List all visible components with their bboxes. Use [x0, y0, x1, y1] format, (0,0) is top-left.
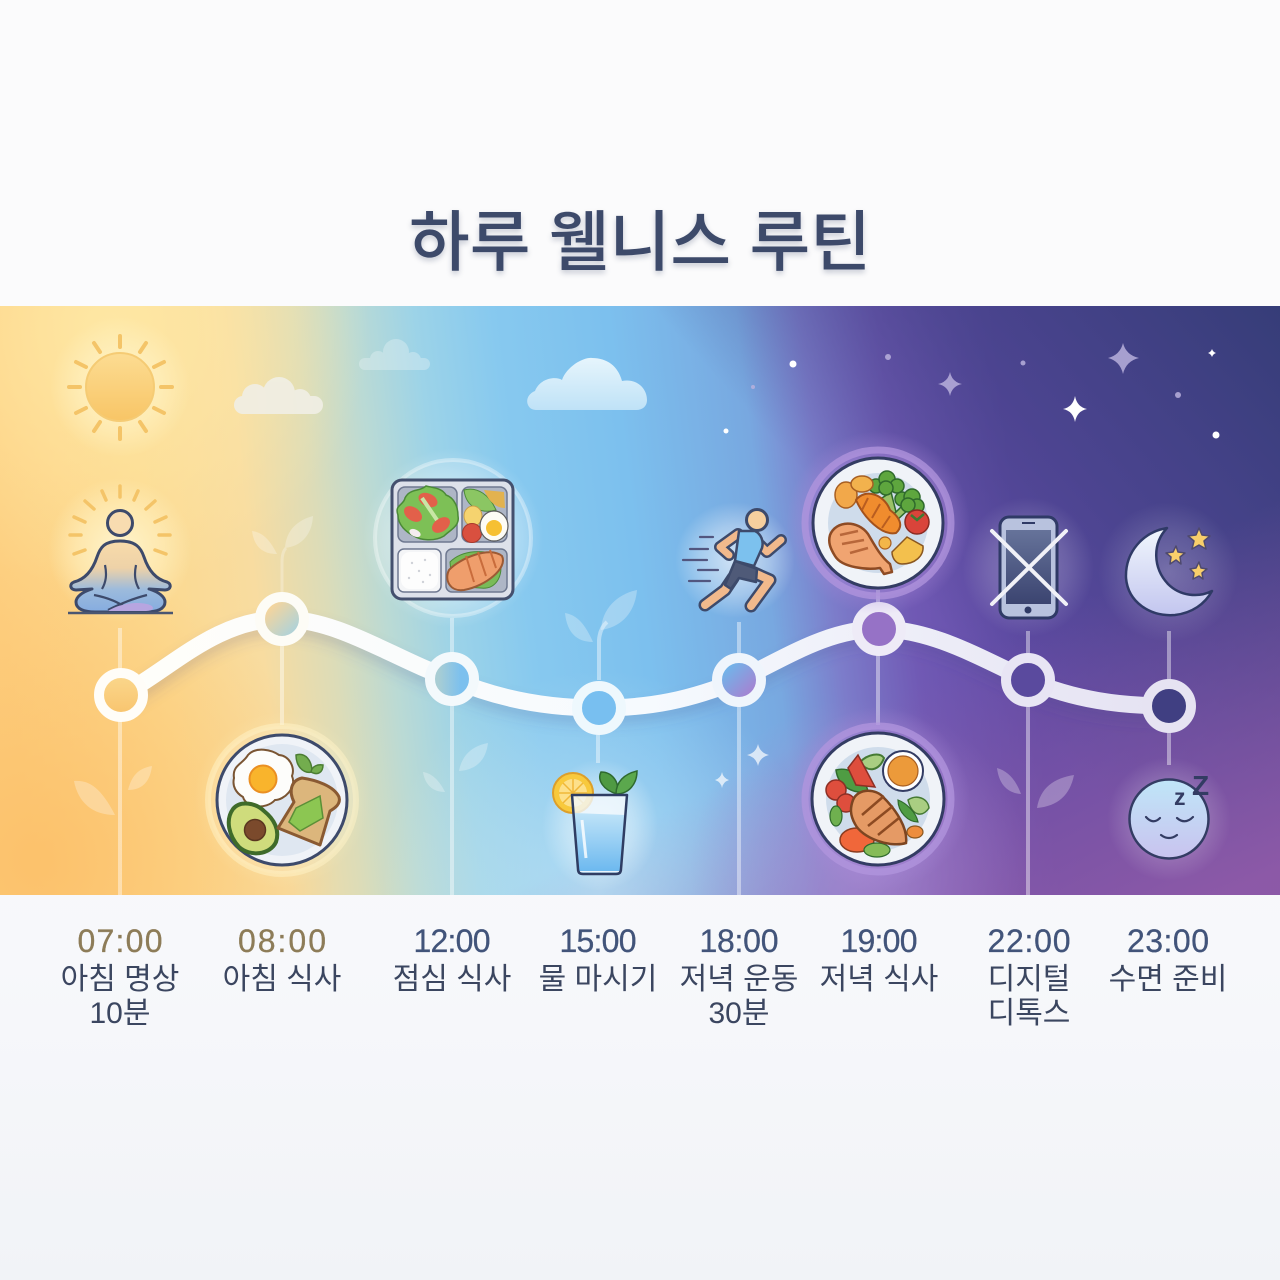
salad — [397, 486, 458, 540]
label: 15:00 drink water — [539, 923, 657, 996]
icon: glass of water with lemon — [542, 759, 658, 891]
icon: bento lunch tray — [363, 448, 543, 628]
rice — [401, 552, 438, 589]
icon: phone crossed out — [962, 497, 1094, 637]
label: 07:00 morning meditation: 아침 명상 — [61, 963, 179, 996]
icon: sleeping face: Z — [1192, 770, 1209, 801]
label: 19:00 dinner: 저녁 식사 — [820, 963, 938, 996]
panel: day to night gradient band — [0, 306, 1280, 895]
sparkles — [715, 744, 769, 788]
carrots and salmon — [835, 482, 857, 508]
label: 07:00 morning meditation — [61, 923, 179, 1030]
label: 23:00 sleep preparation: 23:00 — [1127, 923, 1209, 959]
icon: cloud blue — [527, 358, 647, 410]
label: 08:00 breakfast: 아침 식사 — [223, 963, 341, 996]
top right compartment — [464, 489, 496, 511]
icon: sleeping face — [1107, 757, 1231, 881]
label: 23:00 sleep preparation — [1109, 923, 1227, 996]
label: 22:00 digital detox: 22:00 — [988, 923, 1070, 959]
title: 하루 웰니스 루틴 — [409, 189, 871, 285]
sauce bowl — [883, 751, 923, 791]
label: 07:00 morning meditation: 07:00 — [78, 923, 162, 959]
icon: dinner plate with grilled chicken salad — [786, 707, 970, 891]
egg — [233, 750, 293, 806]
label: 19:00 dinner — [820, 923, 938, 996]
label: 22:00 digital detox: 디톡스 — [988, 997, 1070, 1030]
icon: cloud left — [234, 377, 323, 414]
salmon — [450, 552, 501, 588]
timeline wave shadow — [121, 627, 1169, 716]
label: 23:00 sleep preparation: 수면 준비 — [1109, 963, 1227, 996]
label: 12:00 lunch: 12:00 — [414, 923, 490, 959]
timeline nodes — [99, 597, 1191, 730]
drumstick — [829, 524, 892, 574]
label: 07:00 morning meditation: 10분 — [90, 997, 150, 1030]
broccoli — [869, 471, 924, 522]
label: 18:00 evening exercise: 저녁 운동 — [680, 963, 798, 996]
label: 12:00 lunch — [393, 923, 511, 996]
icon: breakfast plate — [194, 712, 370, 888]
label: 22:00 digital detox — [988, 923, 1070, 1030]
grilled chicken — [851, 791, 906, 844]
night sky stars — [724, 343, 1220, 438]
icon: crescent moon with stars — [1098, 502, 1238, 642]
label: 15:00 drink water: 물 마시기 — [539, 963, 657, 996]
label: 22:00 digital detox: 디지털 — [988, 963, 1070, 996]
label: 15:00 drink water: 15:00 — [560, 923, 636, 959]
icon: sun — [50, 317, 190, 457]
label: 08:00 breakfast: 08:00 — [238, 923, 326, 959]
title: 하루 웰니스 루틴 — [409, 192, 871, 288]
basil — [296, 754, 312, 772]
avocado — [229, 803, 277, 853]
connector lines — [120, 590, 1169, 895]
toast — [278, 778, 339, 845]
timeline wave — [121, 619, 1169, 708]
icon: cloud faint — [359, 339, 430, 370]
decorative sprouts — [74, 516, 1074, 815]
icon: runner — [675, 502, 795, 618]
label: 18:00 evening exercise — [680, 923, 798, 1030]
icon: meditating person — [48, 478, 192, 622]
icon: sleeping face: z — [1174, 784, 1186, 810]
label: 18:00 evening exercise: 18:00 — [700, 923, 778, 959]
label: 18:00 evening exercise: 30분 — [709, 997, 769, 1030]
icon: dinner plate with chicken and vegetables — [786, 431, 970, 615]
label: 19:00 dinner: 19:00 — [840, 923, 918, 959]
greens and vegetables — [860, 755, 884, 769]
label: 08:00 breakfast — [223, 923, 341, 996]
label: 12:00 lunch: 점심 식사 — [393, 963, 511, 996]
